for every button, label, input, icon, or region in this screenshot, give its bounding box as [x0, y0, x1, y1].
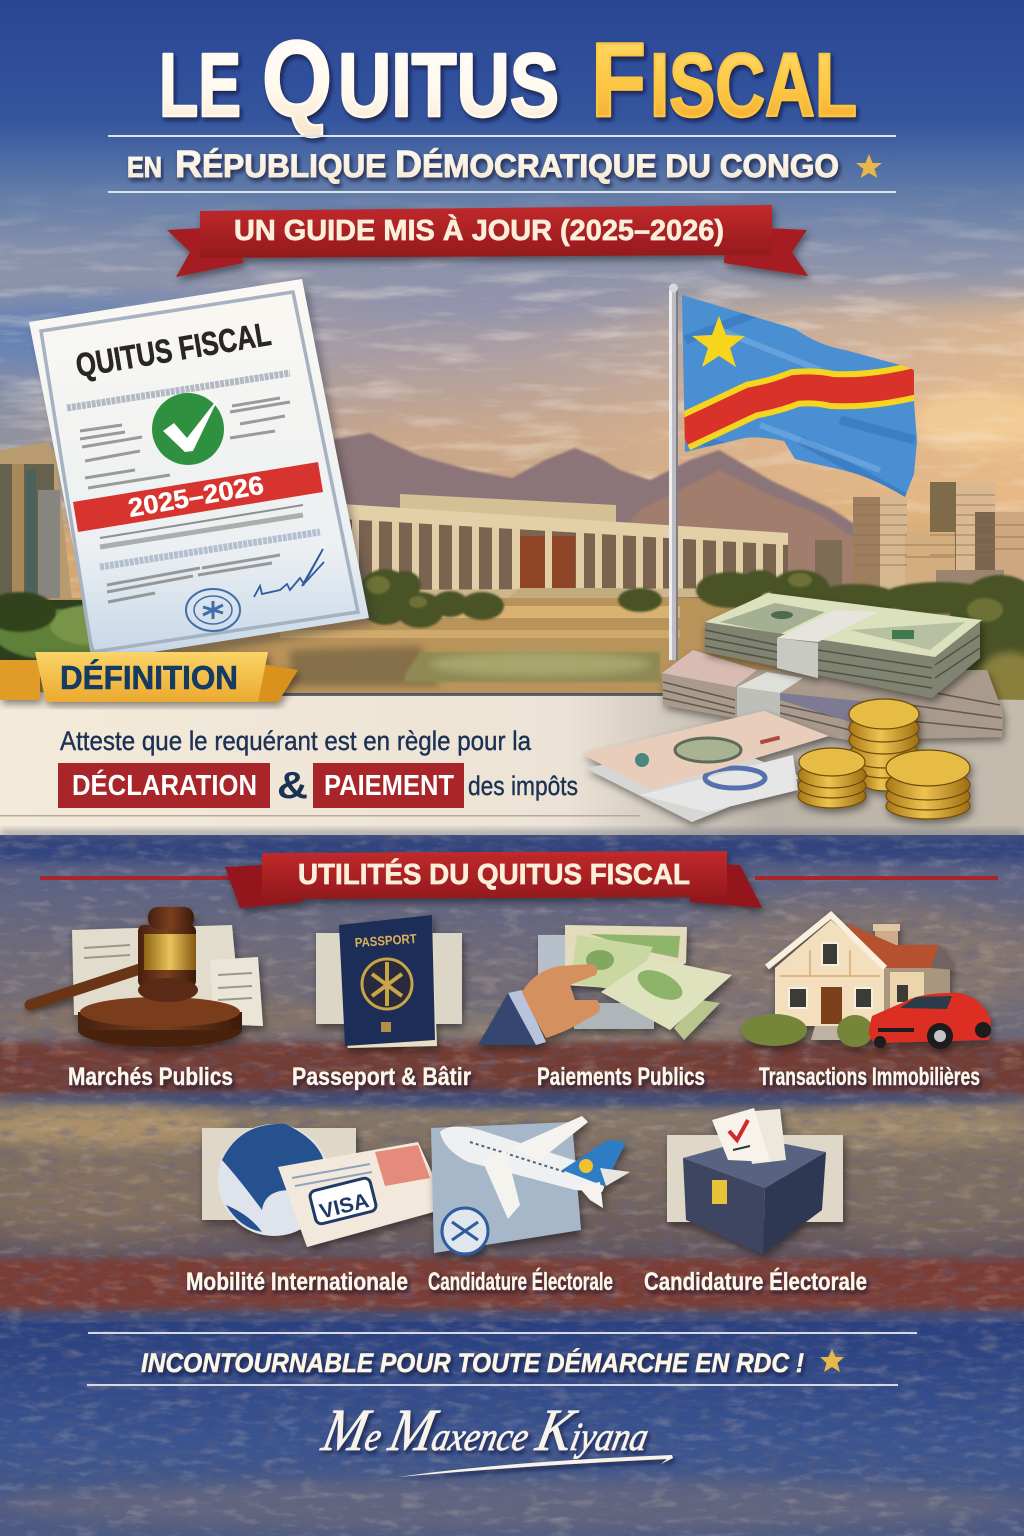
- red date band: 2025–2026: [126, 470, 266, 523]
- left office building: [0, 442, 72, 600]
- icon: star: [820, 1349, 844, 1372]
- definition ribbon: DÉFINITION: [60, 659, 238, 696]
- document heading: QUITUS FISCAL: [73, 315, 273, 384]
- document guilloche strips and text lines: [67, 373, 320, 602]
- icon: globe and visa: VISA: [317, 1189, 371, 1224]
- label: passeport et bâtir: Passeport & Bâtir: [292, 1063, 471, 1091]
- closing statement: INCONTOURNABLE POUR TOUTE DÉMARCHE EN RDC !: [141, 1347, 804, 1378]
- keyword: paiement: [313, 763, 464, 808]
- label: candidature électorale (centre): Candidature Électorale: [428, 1267, 613, 1296]
- signature: [254, 549, 324, 597]
- icon: green check seal: [152, 393, 224, 465]
- government palace with columns: [342, 494, 788, 610]
- city skyline: [815, 482, 1024, 607]
- section ribbon: utilités: [40, 851, 998, 908]
- definition ribbon: [0, 652, 298, 702]
- illustration: banknotes and coins: [582, 593, 1003, 822]
- document: quitus fiscal certificate: [29, 279, 374, 671]
- label: marchés publics: Marchés Publics: [68, 1063, 233, 1091]
- title: UITUS: [338, 36, 559, 136]
- paper band: definition: [0, 692, 1024, 838]
- icon: passport: PASSPORT: [354, 931, 417, 950]
- flagpole: [669, 284, 678, 660]
- icon: globe and visa: [202, 1124, 448, 1247]
- icon: passport: [316, 915, 462, 1048]
- gardens, ground and pond: [0, 569, 1024, 708]
- label: paiements publics: Paiements Publics: [537, 1063, 705, 1091]
- icon: ballot box: [667, 1108, 843, 1254]
- subtitle with rules and star: RÉPUBLIQUE DÉMOCRATIQUE DU CONGO: [175, 144, 839, 186]
- ribbon: guide date: [167, 205, 808, 277]
- ribbon: guide date: UN GUIDE MIS À JOUR (2025–2026): [234, 213, 724, 247]
- sentence end: des impôts: [468, 771, 578, 801]
- closing banner: [87, 1332, 917, 1386]
- definition sentence: Atteste que le requérant est en règle pour la: [60, 726, 532, 756]
- icon: hand holding banknotes: [478, 925, 732, 1045]
- red date band: [73, 462, 323, 532]
- ampersand: &: [277, 765, 308, 807]
- keyword: paiement: PAIEMENT: [324, 770, 454, 802]
- title: LE: [159, 36, 241, 136]
- label: candidature électorale (droite): Candidature Électorale: [644, 1267, 867, 1296]
- section ribbon: utilités: UTILITÉS DU QUITUS FISCAL: [298, 857, 690, 891]
- loose banknotes: [582, 711, 829, 822]
- icon: airplane over map: [431, 1116, 630, 1254]
- keyword: déclaration: DÉCLARATION: [72, 768, 257, 802]
- title: Q: [262, 18, 332, 139]
- landscape: mountains: [330, 433, 880, 600]
- bottom banknote stack: [662, 650, 1003, 740]
- icon: gavel and documents: [30, 907, 263, 1047]
- gold coin stacks: [798, 699, 970, 819]
- subtitle with rules and star: EN: [127, 152, 162, 184]
- icon: DRC flag: [680, 290, 920, 500]
- title: ISCAL: [650, 36, 857, 136]
- official stamp: [186, 589, 240, 631]
- label: mobilité internationale: Mobilité Internationale: [186, 1268, 408, 1296]
- icon: house and car: [741, 915, 991, 1049]
- keyword: déclaration: [58, 763, 270, 808]
- signature: Me Maxence Kiyana: [316, 1398, 656, 1464]
- subtitle with rules and star: [108, 135, 896, 193]
- title: [159, 18, 857, 139]
- top banknote stack: [705, 593, 982, 698]
- title: F: [591, 21, 646, 139]
